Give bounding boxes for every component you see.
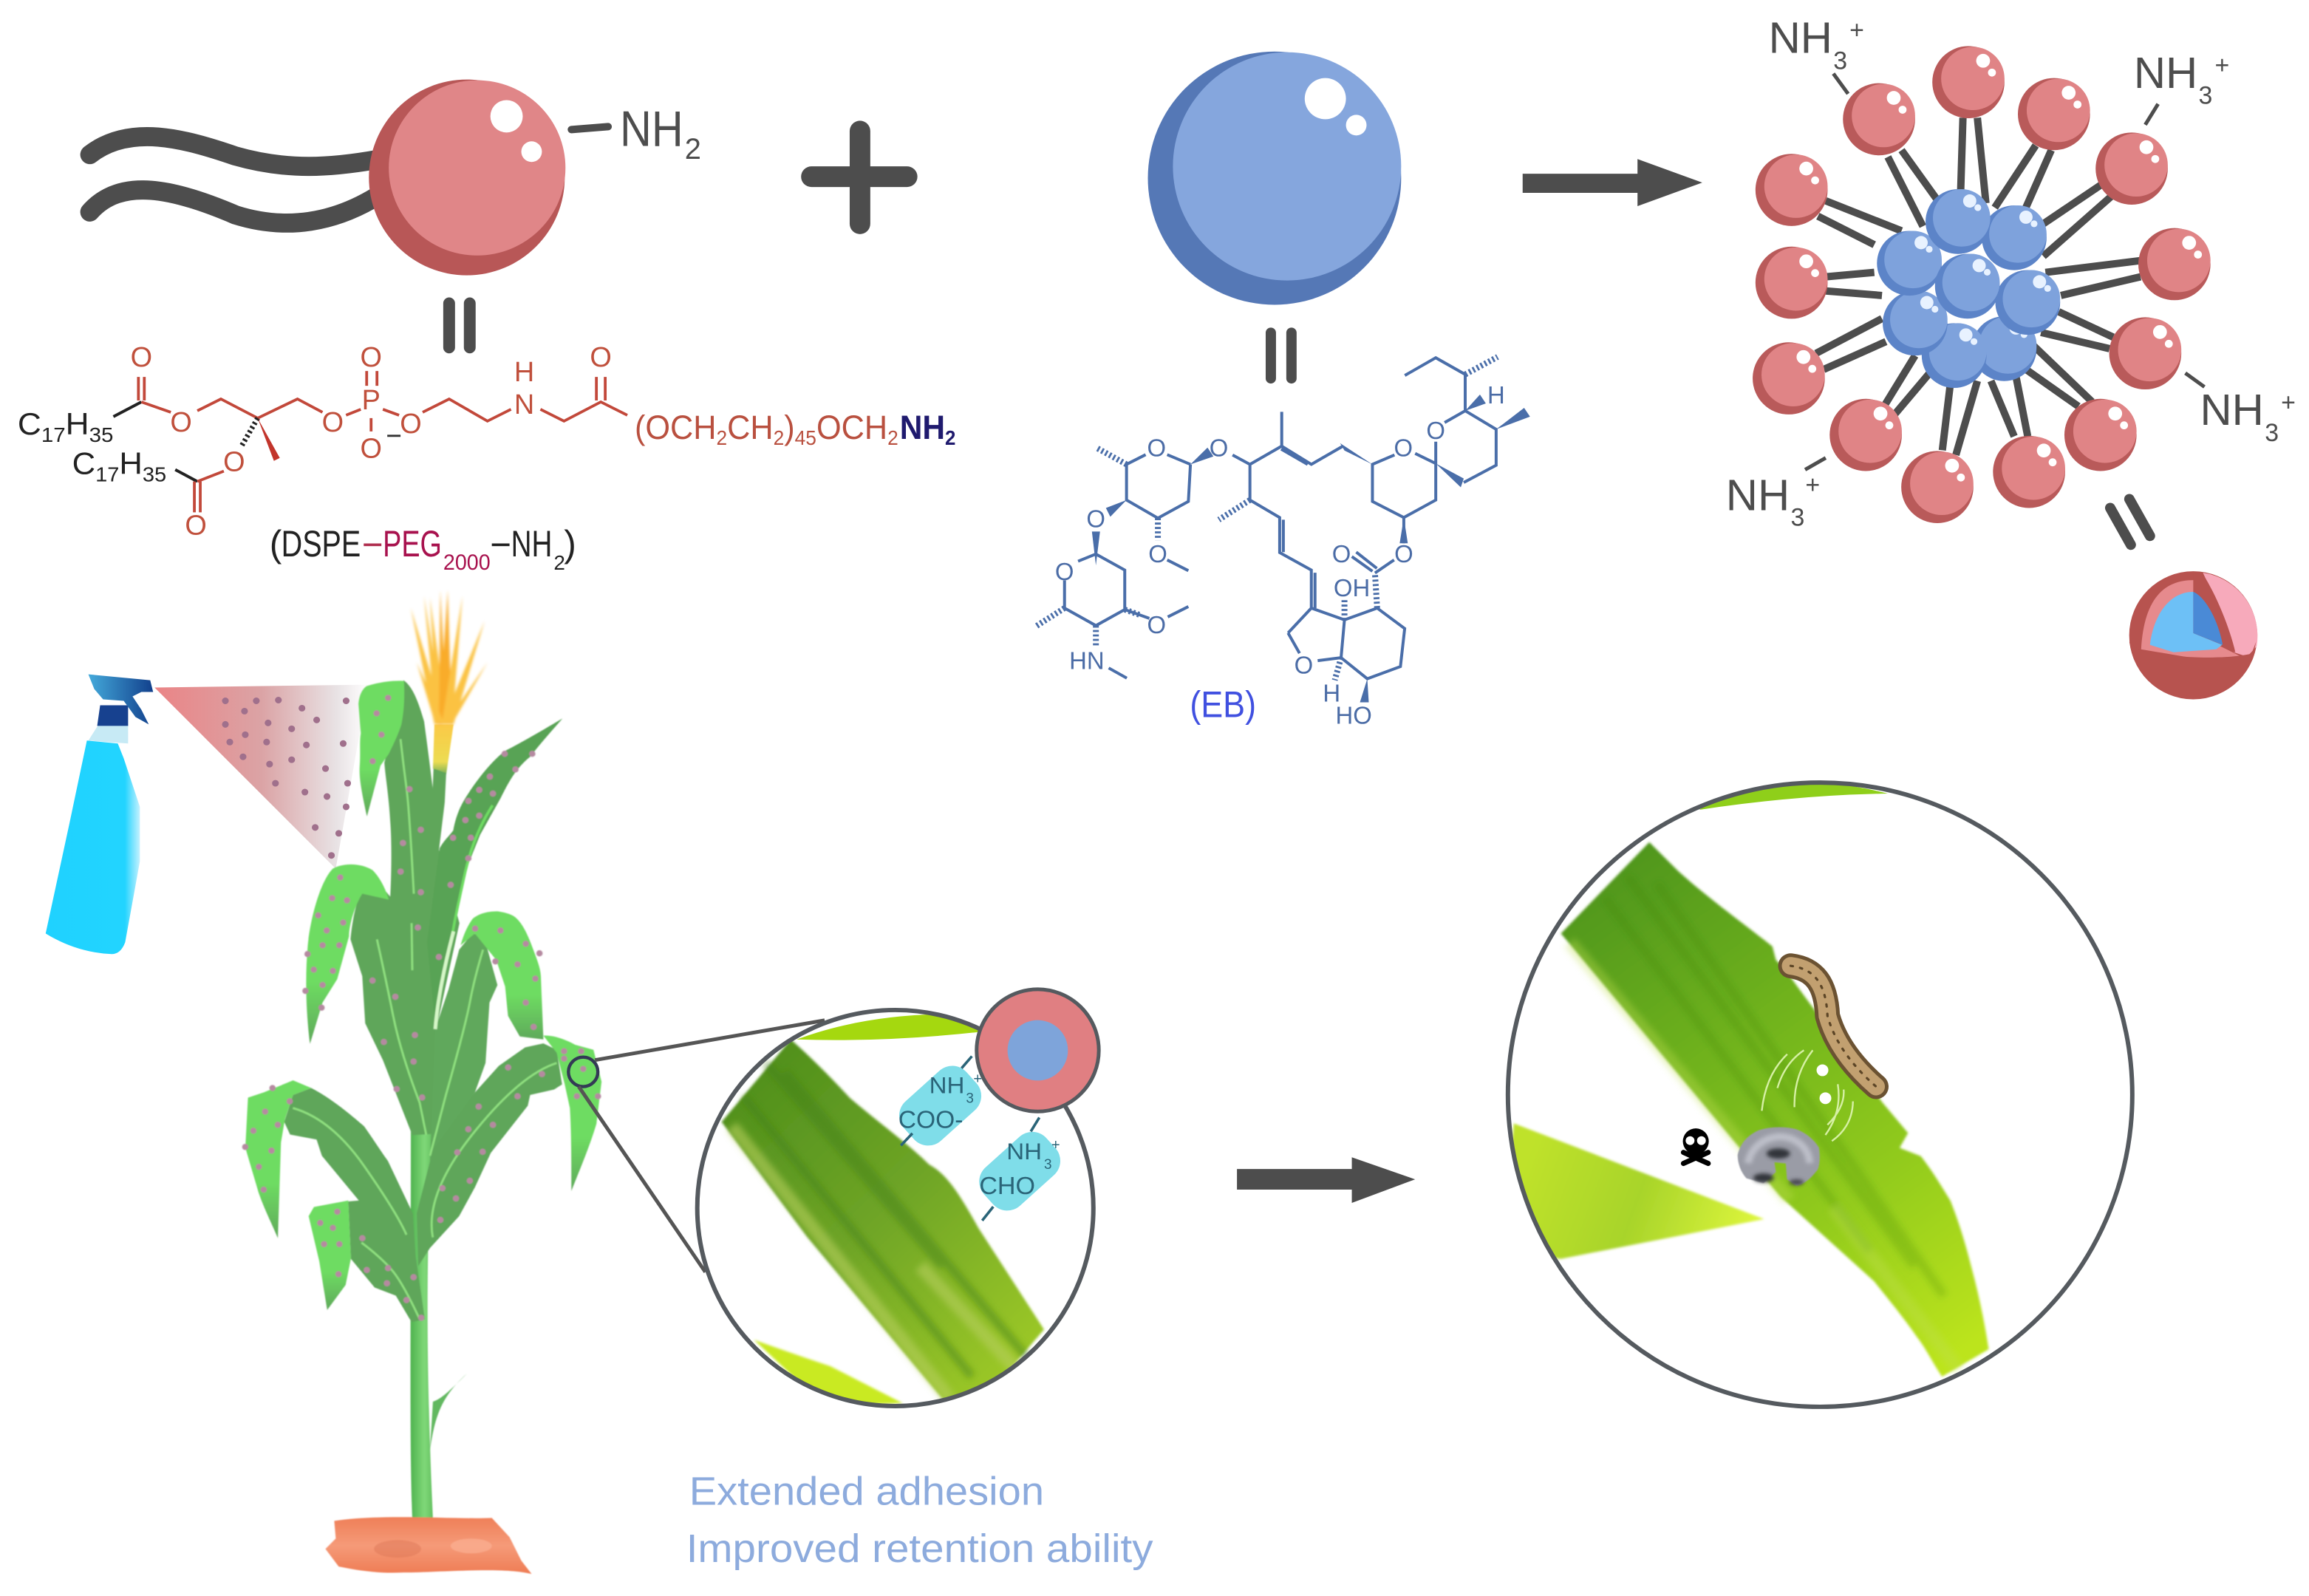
hetero atoms: O <box>1147 611 1166 638</box>
lens outline <box>1508 782 2132 1407</box>
amine label: NH <box>620 101 683 157</box>
plain bonds <box>1065 358 1496 679</box>
red sphere head <box>369 80 565 276</box>
retention text <box>686 1469 1153 1571</box>
lower C17H35 label: C <box>72 446 95 481</box>
hetero atoms: O <box>131 342 152 373</box>
hetero atoms: H <box>1487 381 1505 409</box>
caterpillar feeding <box>1790 966 1876 1087</box>
arrow: action <box>1237 1157 1415 1203</box>
terminal amine: NH <box>900 409 949 446</box>
hetero atoms: O <box>1394 434 1413 462</box>
NH3+ label upper left: + <box>1849 16 1864 44</box>
upper right leaf <box>427 718 562 1031</box>
red bonds <box>138 371 627 512</box>
DSPE-PEG2000-NH2 caption: DSPE <box>282 523 361 565</box>
DSPE-PEG2000-NH2 caption: NH <box>511 523 552 565</box>
hetero atoms: P <box>362 385 381 416</box>
core-shell cutaway sphere <box>2129 571 2257 699</box>
NH3+ label lower left: NH <box>1726 470 1790 519</box>
retention text: Extended adhesion <box>689 1469 1044 1513</box>
hetero atoms: O <box>1332 540 1351 567</box>
NH3+ label upper left: 3 <box>1833 47 1847 75</box>
terminal amine: 2 <box>945 426 955 449</box>
DSPE-PEG2000-NH2 caption <box>270 523 576 575</box>
upper C17H35 label: H <box>66 406 89 441</box>
lipid tails <box>90 137 380 223</box>
lipid tails <box>1816 117 2141 455</box>
hetero atoms: O <box>223 447 245 478</box>
NH3+ label upper right: 3 <box>2199 82 2212 110</box>
NH3+ label right: NH <box>2200 385 2264 434</box>
middle right leaf dark part <box>430 933 497 1161</box>
bottle body <box>46 740 140 954</box>
binding pill: NH3+ CHO: 3 <box>1044 1157 1052 1173</box>
light strip <box>435 932 454 1029</box>
side shoot <box>430 1374 467 1450</box>
dead larva <box>1738 1127 1820 1186</box>
wedge bonds <box>1092 395 1530 702</box>
arrow: assembly <box>1523 159 1702 206</box>
NH3+ label lower left: 3 <box>1790 503 1804 531</box>
hetero atoms: O <box>361 342 382 373</box>
hetero atoms: H <box>514 357 534 388</box>
spray cone with droplets <box>154 685 368 869</box>
plus sign <box>811 131 907 224</box>
hetero atoms: O <box>590 342 612 373</box>
hetero atoms: O <box>185 510 207 541</box>
NH3+ label upper right: NH <box>2134 48 2197 98</box>
hetero atoms: O <box>400 409 422 440</box>
DSPE-PEG2000-NH2 caption: ) <box>564 523 576 565</box>
bottle collar <box>98 705 128 726</box>
leaf image <box>722 1014 1044 1413</box>
upper C17H35 label: 35 <box>89 423 113 446</box>
tassel <box>411 590 488 851</box>
lower C17H35 label: 17 <box>95 463 119 486</box>
DSPE-PEG2000-NH2 structure <box>18 342 955 541</box>
central upright leaf and mass <box>350 681 460 1135</box>
phosphate charge <box>387 435 400 437</box>
hetero atoms: O <box>1147 434 1166 462</box>
lower C17H35 label: 35 <box>143 463 166 486</box>
PEG chain label: 2 <box>774 426 784 449</box>
PEG chain label: 2 <box>887 426 898 449</box>
hetero atoms: O <box>1210 434 1228 462</box>
binding pill: NH3+ COO-: COO- <box>898 1105 963 1133</box>
binding pill: NH3+ CHO <box>972 1117 1068 1221</box>
hetero atoms: O <box>1295 652 1313 679</box>
hetero atoms: OH <box>1334 574 1370 601</box>
NH3+ label lower left <box>1726 458 1826 531</box>
bottle neck <box>89 724 128 743</box>
PEG chain label: 2 <box>717 426 727 449</box>
DSPE-PEG2000-NH2 caption: 2000 <box>443 550 491 575</box>
stem <box>411 1104 439 1519</box>
equals sign micelle <box>2110 499 2150 545</box>
amine label: 2 <box>685 133 701 166</box>
toxic motion marks <box>1761 1050 1853 1141</box>
upper C17H35 label: 17 <box>41 423 66 446</box>
lower left leaf light tip <box>245 1080 311 1238</box>
NH3+ label upper right: + <box>2214 52 2229 80</box>
skull icon <box>1683 1128 1709 1164</box>
hetero atoms: N <box>514 389 534 420</box>
magnified leaf panel <box>698 1010 1094 1413</box>
DSPE-PEG2000-NH2 caption: ( <box>270 523 282 565</box>
equals sign under drug <box>1271 332 1292 378</box>
hetero atoms: O <box>1086 505 1105 532</box>
corn plant <box>245 590 601 1574</box>
hetero atoms: O <box>1394 540 1413 567</box>
adhered droplets <box>245 698 598 1317</box>
zoom ring on leaf <box>568 1057 598 1087</box>
leaf veins <box>293 739 556 1319</box>
binding pill: NH3+ CHO: CHO <box>979 1172 1035 1199</box>
retention text: Improved retention ability <box>686 1527 1153 1571</box>
lower right leaf light tip <box>543 1036 601 1191</box>
DSPE-PEG2000-NH2 caption: 2 <box>553 551 565 574</box>
upper left leaf light tip <box>306 864 389 1044</box>
binding pill: NH3+ COO-: 3 <box>966 1091 974 1106</box>
PEG chain label: 45 <box>795 426 816 449</box>
lower left leaf <box>284 1088 425 1322</box>
DSPE-PEG2000-NH2 caption: PEG <box>383 523 442 565</box>
emamectin benzoate structure <box>1034 357 1530 729</box>
equals sign under lipid <box>449 303 470 347</box>
nanoparticle cross-section <box>977 989 1099 1111</box>
hetero atoms <box>1055 381 1505 729</box>
lipid molecule diagram <box>90 80 701 276</box>
PEG chain label: ) <box>784 409 795 446</box>
soil <box>325 1517 531 1574</box>
NH3+ label right <box>2186 373 2296 447</box>
trigger head <box>89 675 153 724</box>
NH3+ label upper left <box>1769 13 1864 94</box>
spray bottle <box>46 675 153 954</box>
NH3+ label right: 3 <box>2265 419 2279 447</box>
hetero atoms <box>131 342 612 541</box>
leaf image <box>1502 780 1989 1377</box>
NH3+ label lower left: + <box>1805 471 1820 499</box>
binding pill: NH3+ CHO: NH <box>1006 1138 1042 1164</box>
hashed bonds <box>1034 357 1498 681</box>
NH3+ label right: + <box>2281 389 2296 417</box>
lens outline <box>698 1010 1094 1406</box>
EB caption: (EB) <box>1190 683 1256 725</box>
hetero atoms: HN <box>1069 647 1105 675</box>
blue core spheres <box>1877 189 2060 388</box>
binding pill: NH3+ CHO: + <box>1051 1137 1060 1153</box>
binding pill: NH3+ COO-: NH <box>930 1072 964 1099</box>
PEG chain label: OCH <box>816 409 887 446</box>
small lower leaf light tip <box>309 1201 351 1310</box>
hetero atoms: H <box>1323 679 1340 706</box>
stereo bonds <box>242 418 280 461</box>
hetero atoms: O <box>1426 417 1445 444</box>
upper C17H35 label: C <box>18 406 40 441</box>
hetero atoms: O <box>170 407 192 438</box>
top curled leaf tip <box>358 681 404 816</box>
hetero atoms: O <box>322 407 344 438</box>
binding pill: NH3+ COO- <box>891 1057 989 1153</box>
black alkyl bonds <box>113 402 197 482</box>
hetero atoms: O <box>1055 558 1074 585</box>
micelle assembly <box>1726 13 2296 531</box>
NH3+ label upper right <box>2134 48 2229 125</box>
PEG chain label: CH <box>727 409 774 446</box>
middle right leaf light tip <box>460 911 543 1040</box>
red shell spheres <box>1753 46 2211 523</box>
hetero atoms: HO <box>1335 701 1372 729</box>
pest effect lens panel <box>1502 780 2132 1407</box>
lower right leaf <box>417 1043 562 1266</box>
PEG chain label: (OCH <box>635 409 721 446</box>
binding pill: NH3+ COO-: + <box>973 1071 982 1088</box>
upper right leaf light edge <box>451 805 493 945</box>
amine label <box>571 101 701 166</box>
lower C17H35 label: H <box>119 446 143 481</box>
zoom connector lines <box>579 1020 825 1272</box>
blue drug sphere <box>1148 52 1401 304</box>
hetero atoms: O <box>361 434 382 465</box>
NH3+ label upper left: NH <box>1769 13 1832 63</box>
hetero atoms: O <box>1148 540 1167 567</box>
